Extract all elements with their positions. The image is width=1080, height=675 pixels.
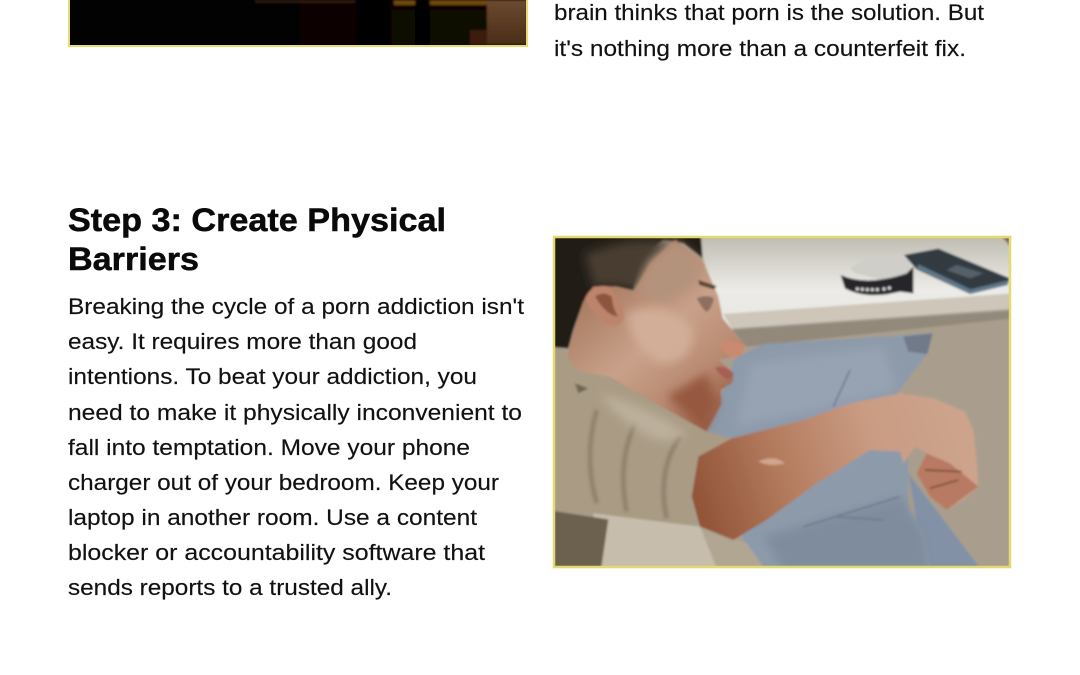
text block: step 3 body: laptop in another room. Use a content: [68, 505, 478, 530]
text block: step 3 body: intentions. To beat your addiction, you: [68, 364, 477, 389]
heading: step 3: Barriers: [68, 241, 199, 277]
text block: step 3 body: Breaking the cycle of a porn addiction isn't: [68, 294, 525, 319]
text block: step 3 body: [68, 294, 525, 600]
text block: intro continuation: it's nothing more than a counterfeit fix.: [554, 36, 966, 61]
panel: top cropped photo: [69, 0, 527, 46]
text block: step 3 body: easy. It requires more than good: [68, 329, 417, 354]
text block: intro continuation: [554, 0, 985, 61]
text block: step 3 body: need to make it physically inconvenient to: [68, 400, 522, 425]
text block: step 3 body: charger out of your bedroom. Keep your: [68, 470, 500, 495]
text block: step 3 body: blocker or accountability software that: [68, 540, 486, 565]
photo: man lying on a pillow: [552, 236, 1012, 568]
text block: step 3 body: sends reports to a trusted ally.: [68, 575, 392, 600]
text block: step 3 body: fall into temptation. Move your phone: [68, 435, 470, 460]
heading: step 3: Step 3: Create Physical: [68, 202, 446, 238]
text block: intro continuation: brain thinks that porn is the solution. But: [554, 0, 985, 25]
heading: step 3: [68, 202, 446, 277]
